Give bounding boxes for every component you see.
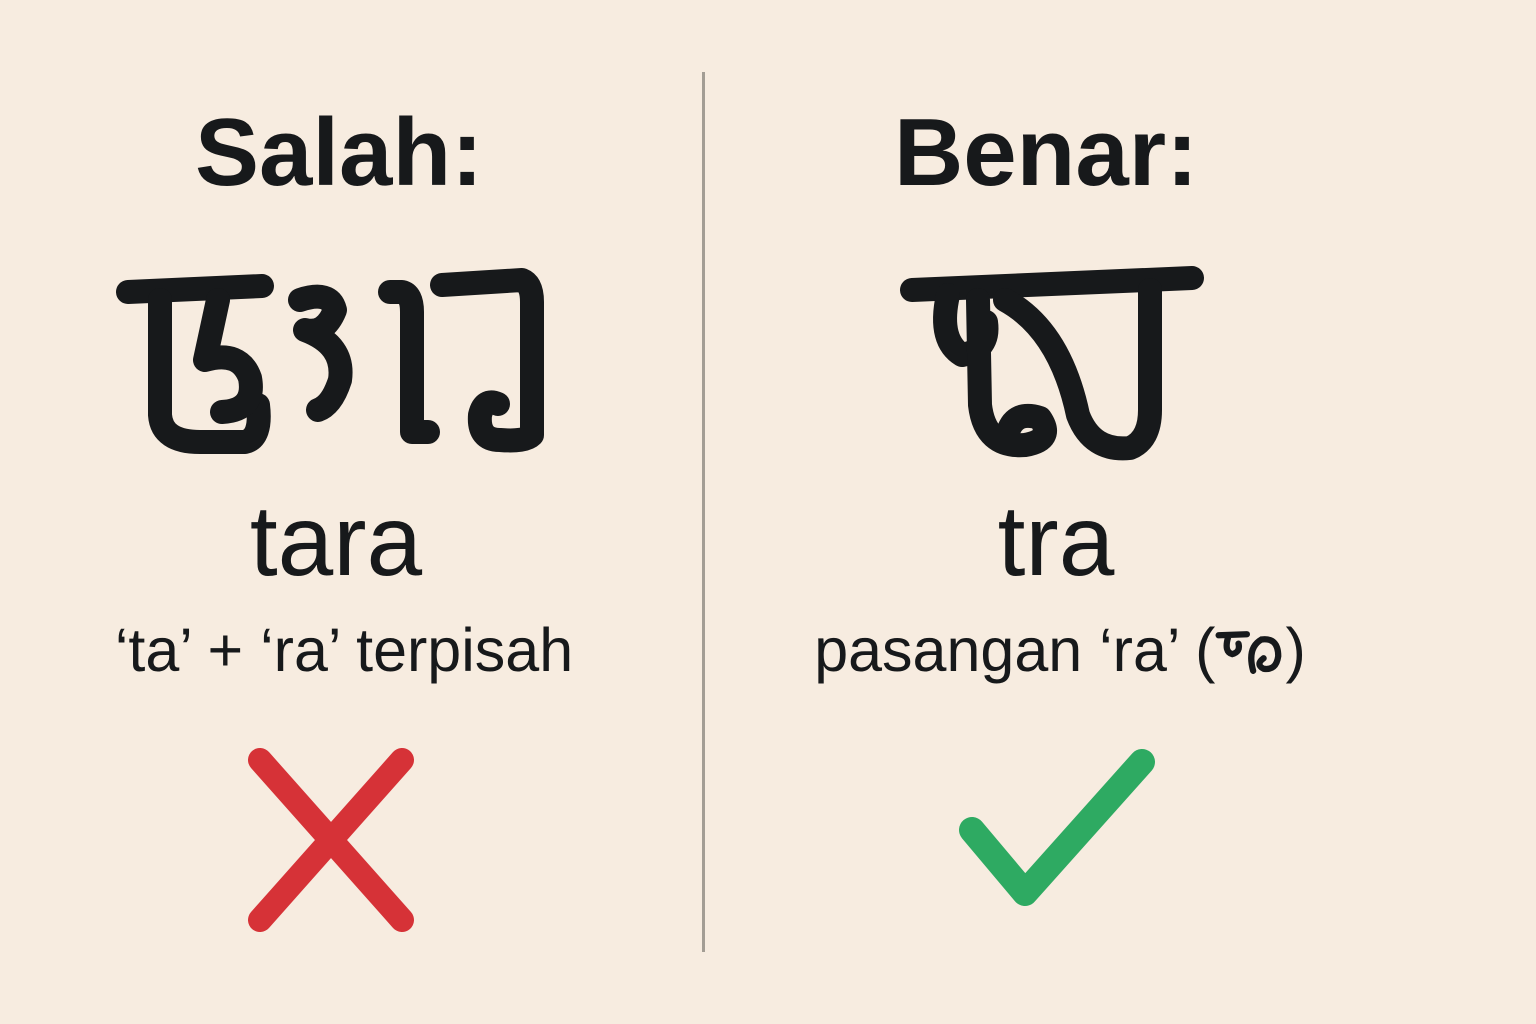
text: explanation correct: pasangan ‘ra’ ( ) bbox=[814, 616, 1306, 684]
heading: Benar: Benar: bbox=[894, 99, 1198, 206]
icon: script glyph wrong (ta + ra separate) bbox=[116, 268, 544, 454]
divider bbox=[702, 72, 705, 952]
heading: Salah: Salah: bbox=[195, 99, 483, 206]
icon: script glyph correct (tra) bbox=[900, 266, 1204, 460]
text: tara: tara bbox=[250, 485, 422, 597]
text: tra: tra bbox=[998, 485, 1114, 597]
icon: red cross bbox=[248, 748, 414, 932]
icon: green check bbox=[959, 749, 1155, 906]
text: explanation wrong: ‘ta’ + ‘ra’ terpisah bbox=[115, 616, 573, 684]
